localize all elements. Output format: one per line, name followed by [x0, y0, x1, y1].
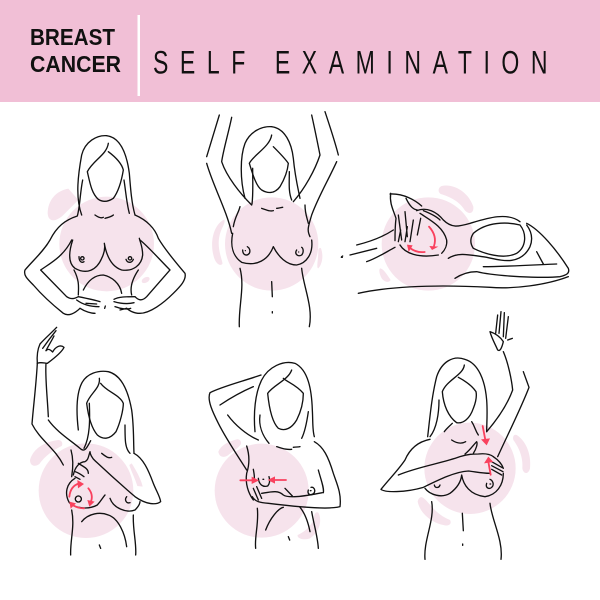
- red arrows: squeeze: [240, 476, 286, 484]
- line drawing: [32, 327, 161, 555]
- pink background: [418, 423, 530, 526]
- red arrows: circular: [407, 227, 438, 252]
- title: breast: BREAST: [30, 24, 115, 50]
- figure 6: arm raised, hand on breast: [381, 312, 530, 559]
- pink background: [215, 439, 320, 539]
- figure 3: lying down: [341, 186, 569, 293]
- line drawing: [207, 112, 343, 327]
- figure 1: hands on hips: [25, 136, 185, 315]
- figure 4: one arm raised, circular motion: [30, 327, 161, 555]
- red arrows: down and up: [481, 426, 493, 475]
- pink background: [212, 197, 322, 291]
- line drawing: [209, 362, 340, 548]
- title: cancer: CANCER: [30, 51, 121, 77]
- pink background: [379, 186, 475, 291]
- line drawing: [341, 193, 569, 293]
- line drawing: [381, 312, 529, 559]
- pink background: [30, 440, 143, 538]
- red arrows: circular: [69, 480, 95, 509]
- figure 2: arms raised: [207, 112, 343, 327]
- title: self examination: SELF EXAMINATION: [153, 45, 548, 80]
- pink background: [48, 189, 154, 291]
- figure 5: arm behind head, squeeze: [209, 362, 340, 548]
- header band: [0, 0, 600, 102]
- line drawing: [25, 136, 185, 315]
